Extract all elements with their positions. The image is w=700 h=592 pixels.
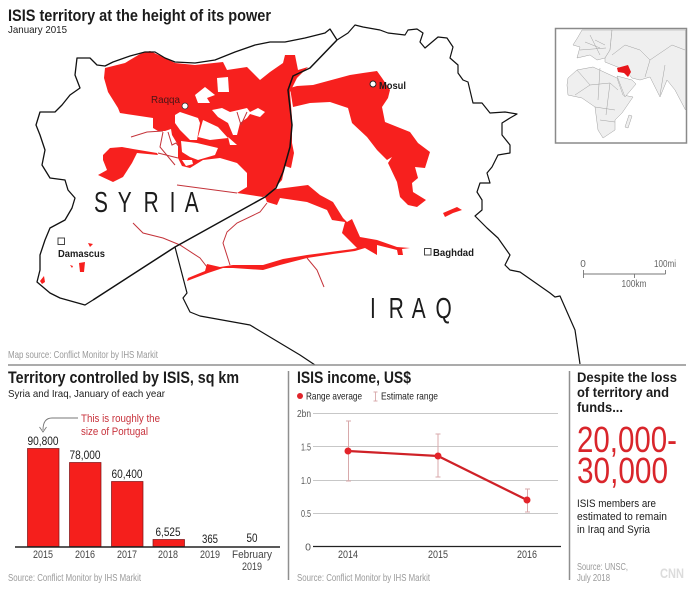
- ISIS territory: Syria: [98, 51, 308, 197]
- ISIS territory: Iraq: [40, 71, 462, 284]
- scale bar: 100km: [622, 279, 646, 290]
- city: Raqqa: [151, 95, 188, 109]
- callout: [40, 413, 160, 438]
- panel: income line chart: [297, 369, 561, 584]
- grid lines: [313, 414, 558, 514]
- panel: territory map: [8, 7, 686, 365]
- year labels: 2016: [517, 549, 537, 561]
- chart source: Source: Conflict Monitor by IHS Markit: [8, 573, 141, 584]
- y axis labels: [297, 408, 311, 554]
- year labels: 2019: [200, 549, 220, 561]
- map source: Map source: Conflict Monitor by IHS Markit: [8, 350, 158, 361]
- bar value labels: 6,525: [156, 527, 180, 539]
- section dividers: [8, 365, 686, 580]
- callout: This is roughly the: [81, 413, 160, 425]
- scale bar: 0: [580, 259, 586, 270]
- Syria and Iraq borders: [36, 25, 580, 365]
- heading: funds...: [577, 399, 623, 415]
- city: Damascus: [58, 238, 105, 260]
- big number: 30,000: [577, 450, 668, 491]
- estimate range bars: [346, 421, 530, 512]
- axis baseline: [313, 546, 561, 548]
- heading: Despite the loss: [577, 369, 677, 385]
- year labels: 2015: [33, 549, 53, 561]
- y axis labels: 1.5: [301, 442, 311, 454]
- bar value labels: [28, 436, 258, 546]
- year labels: [338, 549, 537, 561]
- legend: Range average: [306, 390, 362, 402]
- bar value labels: 90,800: [28, 436, 58, 448]
- heading: of territory and: [577, 384, 669, 400]
- bar value labels: 60,400: [112, 469, 142, 481]
- panel source: [577, 562, 628, 584]
- chart subtitle: Syria and Iraq, January of each year: [8, 388, 165, 400]
- panel source: July 2018: [577, 573, 610, 584]
- subtitle: January 2015: [8, 24, 67, 36]
- year labels: 2015: [428, 549, 448, 561]
- chart heading: Territory controlled by ISIS, sq km: [8, 369, 239, 387]
- chart heading: ISIS income, US$: [297, 369, 411, 387]
- year labels: February: [232, 549, 272, 561]
- year labels: 2016: [75, 549, 95, 561]
- thin supply corridors: [131, 112, 324, 287]
- legend: [297, 390, 438, 402]
- description: ISIS members are: [577, 498, 656, 510]
- locator inset map: [556, 28, 686, 143]
- year labels: 2014: [338, 549, 358, 561]
- big number: [577, 419, 677, 491]
- year labels: 2017: [117, 549, 137, 561]
- y axis labels: 1.0: [301, 475, 311, 487]
- city: Damascus: Damascus: [58, 248, 105, 260]
- axis baseline: [15, 546, 280, 548]
- heading: [577, 369, 677, 415]
- bar value labels: 78,000: [70, 450, 100, 462]
- bar value labels: 50: [246, 533, 258, 545]
- country label: Iraq: IRAQ: [370, 293, 452, 325]
- description: in Iraq and Syria: [577, 524, 651, 536]
- city: Mosul: [370, 80, 406, 92]
- city: Raqqa: Raqqa: [151, 95, 180, 106]
- bars: [28, 448, 184, 546]
- panel: territory bar chart: [8, 369, 280, 584]
- white enclaves within territory: [175, 77, 265, 166]
- description: [577, 498, 667, 536]
- year labels: 2019: [242, 561, 262, 573]
- year labels: 2018: [158, 549, 178, 561]
- y axis labels: 0.5: [301, 508, 311, 520]
- CNN logo: CNN: [660, 565, 684, 581]
- big number: 20,000-: [577, 419, 677, 460]
- y axis labels: 0: [305, 542, 311, 554]
- bar value labels: 365: [202, 534, 218, 546]
- legend: Estimate range: [381, 390, 438, 402]
- panel source: Source: UNSC,: [577, 562, 628, 573]
- scale bar: [580, 259, 676, 290]
- panel: remaining members: [577, 369, 684, 584]
- city: Baghdad: Baghdad: [433, 247, 474, 259]
- chart source: Source: Conflict Monitor by IHS Markit: [297, 573, 430, 584]
- title: ISIS territory at the height of its power: [8, 7, 272, 25]
- callout: size of Portugal: [81, 426, 148, 438]
- average line: [344, 448, 530, 504]
- scale bar: 100mi: [654, 259, 676, 270]
- year labels: [33, 549, 272, 573]
- y axis labels: 2bn: [297, 408, 311, 420]
- description: estimated to remain: [577, 511, 667, 523]
- city: Mosul: Mosul: [379, 80, 406, 92]
- country label: Syria: SYRIA: [94, 187, 199, 219]
